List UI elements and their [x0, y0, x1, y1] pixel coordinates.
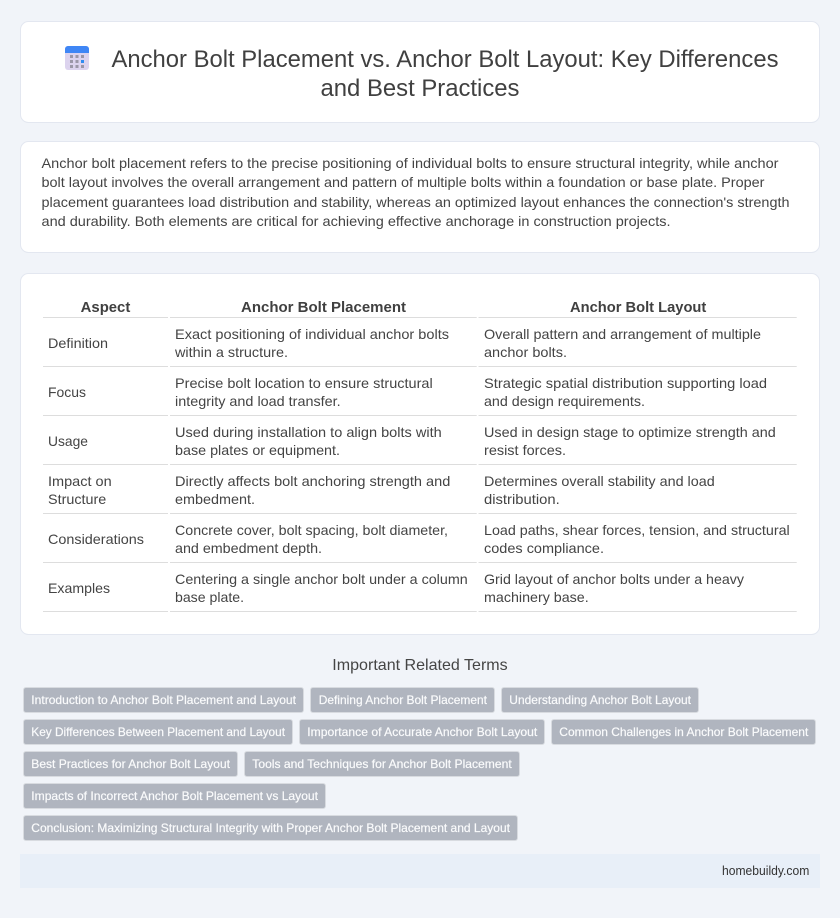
table header: Aspect	[81, 300, 130, 316]
tag	[24, 816, 518, 840]
row: definition: within a structure.	[174, 344, 288, 360]
row: considerations: Concrete cover, bolt spacing, bolt diameter,	[175, 522, 448, 538]
intro text: and durability. Both elements are critical for achieving effective anchorage in construction projects.	[42, 213, 671, 229]
title: and Best Practices	[320, 75, 520, 102]
table header: Anchor Bolt Placement	[241, 300, 406, 316]
heading: important related terms: Important Related Terms	[332, 657, 508, 674]
footer domain: homebuildy.com	[722, 864, 809, 878]
tag: Introduction to Anchor Bolt Placement and Layout	[31, 693, 297, 707]
tag	[24, 752, 238, 776]
row: impact on structure: embedment.	[175, 491, 255, 507]
row: impact on structure: Impact on	[48, 473, 112, 489]
table header: Anchor Bolt Layout	[570, 300, 706, 316]
row: considerations: Load paths, shear forces, tension, and structural	[484, 522, 790, 538]
table header	[43, 300, 797, 318]
tag: Defining Anchor Bolt Placement	[319, 693, 488, 707]
title: Anchor Bolt Placement vs. Anchor Bolt Layout: Key Differences	[112, 46, 778, 73]
row: considerations	[43, 522, 797, 563]
related term tags	[24, 688, 816, 840]
tag: Conclusion: Maximizing Structural Integrity with Proper Anchor Bolt Placement and Layout	[31, 821, 511, 835]
tag	[502, 688, 698, 712]
tag: Importance of Accurate Anchor Bolt Layout	[307, 725, 538, 739]
tag	[244, 752, 520, 776]
row: focus	[43, 375, 797, 416]
title	[112, 46, 778, 102]
row: considerations: and embedment depth.	[175, 540, 322, 556]
tag: Key Differences Between Placement and Layout	[31, 725, 286, 739]
row: considerations: Considerations	[48, 531, 144, 547]
tag	[552, 720, 816, 744]
row: definition	[43, 326, 797, 367]
row: focus: and design requirements.	[484, 393, 645, 409]
tag: Best Practices for Anchor Bolt Layout	[31, 757, 231, 771]
row: impact on structure: Directly affects bolt anchoring strength and	[175, 473, 450, 489]
row: impact on structure: distribution.	[484, 491, 560, 507]
panel: intro	[20, 142, 820, 252]
row: definition: Overall pattern and arrangement of multiple	[484, 326, 761, 342]
row: usage: Usage	[48, 433, 88, 449]
row: examples: Centering a single anchor bolt under a column	[175, 571, 468, 587]
panel: title header	[20, 22, 820, 122]
row: focus: Focus	[48, 384, 86, 400]
row: impact on structure: Structure	[48, 491, 107, 507]
tag: Understanding Anchor Bolt Layout	[509, 693, 692, 707]
row: focus: Strategic spatial distribution supporting load	[484, 375, 767, 391]
icon: calendar	[65, 46, 89, 70]
tag	[310, 688, 494, 712]
row: considerations: codes compliance.	[484, 540, 604, 556]
row: usage: base plates or equipment.	[175, 442, 340, 458]
tag: Impacts of Incorrect Anchor Bolt Placement vs Layout	[31, 789, 319, 803]
row: usage	[43, 424, 797, 465]
row: usage: Used during installation to align bolts with	[175, 424, 442, 440]
intro text: placement guarantees load distribution and stability, whereas an optimized layout enhances the connection's strength	[42, 194, 790, 210]
row: focus: integrity and load transfer.	[175, 393, 341, 409]
row: impact on structure: Determines overall stability and load	[484, 473, 715, 489]
intro text	[42, 155, 790, 229]
row: examples: Grid layout of anchor bolts under a heavy	[484, 571, 744, 587]
tag: Tools and Techniques for Anchor Bolt Placement	[252, 757, 512, 771]
row: definition: Exact positioning of individual anchor bolts	[175, 326, 449, 342]
intro text: bolt layout involves the overall arrangement and pattern of multiple bolts within a foundation or base plate. Proper	[42, 174, 765, 190]
tag	[24, 720, 292, 744]
row: usage: Used in design stage to optimize strength and	[484, 424, 776, 440]
row: definition: anchor bolts.	[484, 344, 567, 360]
tag: Common Challenges in Anchor Bolt Placement	[559, 725, 809, 739]
row: examples: machinery base.	[484, 589, 589, 605]
row: impact on structure	[43, 473, 797, 514]
row: usage: resist forces.	[484, 442, 566, 458]
panel: comparison table	[20, 274, 820, 634]
tag	[24, 784, 326, 808]
footer	[20, 854, 820, 888]
row: examples: base plate.	[175, 589, 244, 605]
row: definition: Definition	[48, 335, 108, 351]
intro text: Anchor bolt placement refers to the precise positioning of individual bolts to ensure structural integrity, while anchor	[42, 155, 779, 171]
tag	[300, 720, 544, 744]
row: examples	[43, 571, 797, 612]
row: examples: Examples	[48, 580, 110, 596]
row: focus: Precise bolt location to ensure structural	[175, 375, 433, 391]
tag	[24, 688, 304, 712]
